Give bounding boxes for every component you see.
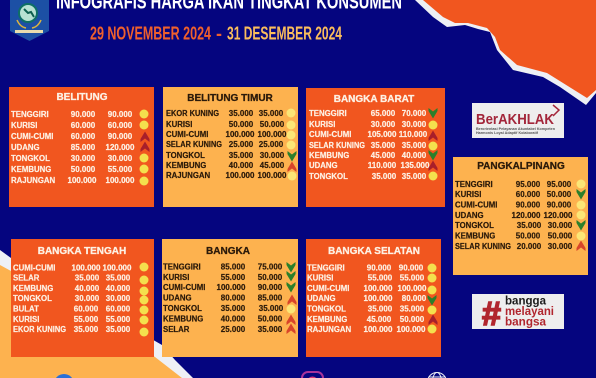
row: Rajungan: 100.000 [397, 325, 426, 334]
row: Cumi-cumi: 100.000 [72, 264, 101, 272]
row: Kembung: 40.000 [229, 161, 254, 170]
row: Cumi-cumi: CUMI-CUMI [13, 264, 55, 272]
row: Kembung [11, 164, 148, 174]
row: Kembung: KEMBUNG [307, 315, 347, 324]
row: Tenggiri: 90.000 [367, 264, 392, 272]
row: Tongkol: 35.000 [400, 304, 425, 314]
panel: Bangka Tengah: BANGKA TENGAH [38, 246, 126, 257]
row: Kurisi [455, 189, 586, 200]
row: Kurisi [166, 120, 296, 130]
row: Rajungan: RAJUNGAN [11, 176, 56, 185]
row: Tenggiri [455, 180, 586, 189]
row: Kurisi: 55.000 [106, 315, 131, 324]
row: Tongkol: TONGKOL [166, 151, 205, 160]
row: Tongkol [455, 220, 586, 230]
date range: 31 DESEMBER 2024 [227, 24, 342, 44]
row: Tongkol: TONGKOL [13, 294, 52, 303]
row: Cumi-cumi: 90.000 [547, 200, 572, 210]
row: Ekor Kuning: 35.000 [74, 325, 99, 334]
row: Rajungan: RAJUNGAN [307, 325, 352, 334]
row: Tenggiri: TENGGIRI [307, 264, 345, 272]
row: Kembung: 45.000 [367, 315, 392, 324]
row: Kurisi [307, 274, 436, 282]
row: Selar Kuning: SELAR KUNING [309, 141, 365, 150]
row: Selar Kuning: SELAR KUNING [455, 242, 511, 251]
row: Tongkol: TONGKOL [11, 154, 50, 163]
row: Udang [11, 142, 150, 152]
row: Kembung: 50.000 [400, 315, 425, 324]
row: Kembung: KEMBUNG [166, 161, 206, 170]
row: Kurisi: KURISI [455, 190, 481, 199]
row: Udang: 120.000 [106, 143, 135, 152]
row: Ekor Kuning: 35.000 [106, 325, 131, 334]
row: Selar Kuning: 20.000 [517, 242, 542, 251]
row: Tongkol: 30.000 [75, 294, 100, 303]
row: Kurisi: 60.000 [71, 121, 96, 130]
row: Udang: UDANG [307, 294, 336, 303]
row: Kembung: 50.000 [258, 314, 283, 324]
row: Cumi-cumi: 90.000 [108, 132, 133, 141]
row: Kurisi: KURISI [307, 274, 333, 282]
logo: provincial shield [10, 0, 49, 41]
row: Cumi-cumi [166, 130, 296, 140]
row: Rajungan: 100.000 [106, 176, 135, 185]
row: Selar Kuning: 35.000 [402, 141, 427, 150]
decoration: top right orange shape [423, 0, 596, 98]
row: Tenggiri: 75.000 [258, 262, 283, 272]
row: Cumi-cumi [309, 130, 438, 141]
row: Tongkol: 35.000 [372, 172, 397, 181]
panel: Bangka Selatan: BANGKA SELATAN [328, 246, 420, 257]
row: Rajungan [307, 324, 436, 334]
panel: Bangka Selatan [306, 239, 441, 357]
row: Rajungan: 100.000 [226, 171, 255, 180]
row: Tongkol: TONGKOL [307, 304, 346, 314]
row: Udang: 85.000 [71, 143, 96, 152]
row: Ekor Kuning: 35.000 [229, 109, 254, 118]
row: Bulat [13, 304, 148, 314]
row: Kembung: KEMBUNG [163, 314, 203, 324]
row: Kurisi: 55.000 [368, 274, 393, 282]
row: Cumi-cumi: 110.000 [399, 130, 428, 139]
row: Kembung: 40.000 [75, 284, 100, 293]
row: Kurisi [309, 120, 438, 130]
row: Kurisi: 60.000 [516, 190, 541, 199]
row: Selar Kuning: 25.000 [229, 140, 254, 149]
badge: BerAKHLAK: Harmonis Loyal Adaptif Kolaboratif [476, 131, 539, 135]
row: Tongkol: TONGKOL [309, 172, 348, 181]
panel: Belitung Timur: BELITUNG TIMUR [187, 93, 274, 104]
row: Kurisi: 30.000 [402, 120, 427, 129]
row: Cumi-cumi: 100.000 [364, 284, 393, 293]
row: Kurisi: KURISI [13, 315, 39, 324]
row: Kembung: 40.000 [221, 314, 246, 324]
row: Kurisi: 55.000 [400, 274, 425, 282]
row: Udang [307, 294, 436, 306]
row: Udang: UDANG [455, 211, 484, 220]
row: Tongkol: 30.000 [548, 221, 573, 230]
row: Cumi-cumi: CUMI-CUMI [166, 130, 208, 139]
row: Kembung: KEMBUNG [309, 151, 349, 160]
decoration: bottom left torn white edge [0, 250, 193, 378]
row: Tenggiri: 85.000 [221, 262, 246, 272]
row: Kembung: KEMBUNG [455, 232, 495, 240]
row: Cumi-cumi [455, 200, 586, 210]
row: Selar: SELAR [13, 274, 40, 282]
row: Kurisi [13, 315, 148, 324]
row: Kembung: KEMBUNG [11, 165, 51, 174]
row: Udang [455, 210, 586, 220]
row: Selar Kuning: SELAR KUNING [166, 140, 222, 149]
row: Cumi-cumi: CUMI-CUMI [309, 130, 351, 139]
panel: Bangka Barat: BANGKA BARAT [334, 94, 414, 105]
row: Tongkol: 30.000 [106, 294, 131, 303]
row: Ekor Kuning: EKOR KUNING [166, 109, 219, 118]
row: Kembung: 40.000 [106, 284, 131, 293]
row: Cumi-cumi: CUMI-CUMI [163, 283, 205, 292]
row: Udang: UDANG [11, 143, 40, 152]
row: Kurisi: 30.000 [371, 120, 396, 129]
row: Tenggiri: TENGGIRI [11, 110, 49, 119]
row: Kurisi: 50.000 [547, 190, 572, 199]
row: Ekor Kuning: 35.000 [259, 109, 284, 118]
row: Tongkol: TONGKOL [163, 304, 202, 313]
row: Cumi-cumi [13, 262, 148, 272]
row: Udang: 135.000 [401, 161, 430, 170]
badge: BerAKHLAK: Berorientasi Pelayanan Akuntabel Kompeten [476, 127, 555, 131]
row: Udang: 120.000 [512, 211, 541, 220]
row: Kembung [455, 232, 586, 240]
row: Udang: 100.000 [364, 294, 393, 303]
row: Tenggiri: 90.000 [71, 110, 96, 119]
row: Tenggiri: TENGGIRI [163, 262, 201, 272]
row: Tongkol: 35.000 [368, 304, 393, 314]
row: Bulat: 60.000 [106, 304, 131, 314]
row: Tongkol [163, 304, 296, 314]
row: Selar [163, 324, 296, 334]
badge: bangga melayani bangsa: # [482, 295, 501, 332]
row: Kurisi: 55.000 [74, 315, 99, 324]
row: Selar Kuning: 25.000 [259, 140, 284, 149]
row: Tongkol: 30.000 [71, 154, 96, 163]
badge: bangga melayani bangsa: bangsa [505, 314, 546, 328]
row: Tongkol [11, 154, 148, 163]
row: Kurisi: KURISI [163, 273, 189, 282]
row: Kembung: 50.000 [548, 232, 573, 240]
row: Kembung: 45.000 [371, 151, 396, 160]
row: Kembung [309, 150, 438, 160]
badge: BerAKHLAK: BerAKHLAK [476, 111, 554, 128]
row: Cumi-cumi [307, 284, 436, 294]
panel: Pangkalpinang: PANGKALPINANG [477, 161, 565, 172]
row: Tenggiri [309, 108, 438, 118]
badge: bangga melayani bangsa: bangga [505, 294, 546, 308]
row: Kembung: 55.000 [108, 165, 133, 174]
row: Rajungan: 100.000 [258, 171, 287, 180]
date range: 29 NOVEMBER 2024 [90, 24, 211, 44]
row: Rajungan [166, 171, 296, 180]
row: Cumi-cumi [163, 282, 296, 292]
icon: instagram [302, 372, 323, 378]
row: Selar: SELAR [163, 325, 190, 334]
row: Kembung [13, 284, 148, 296]
row: Selar Kuning: 35.000 [371, 141, 396, 150]
row: Tongkol [309, 172, 438, 181]
row: Udang: 85.000 [258, 294, 283, 302]
row: Tenggiri: TENGGIRI [455, 180, 493, 189]
row: Tenggiri: 95.000 [516, 180, 541, 189]
row: Kurisi: 55.000 [221, 273, 246, 282]
row: Udang: UDANG [163, 294, 192, 302]
row: Kembung [166, 161, 296, 172]
row: Bulat: BULAT [13, 304, 39, 314]
row: Kurisi: 50.000 [260, 120, 285, 129]
row: Selar Kuning [455, 240, 586, 251]
row: Tongkol: 35.000 [517, 221, 542, 230]
row: Kembung: 50.000 [71, 165, 96, 174]
panel: Belitung [9, 87, 154, 207]
row: Udang: UDANG [309, 161, 338, 170]
row: Udang [163, 294, 296, 305]
row: Cumi-cumi: 60.000 [71, 132, 96, 141]
row: Selar Kuning [166, 140, 296, 150]
row: Ekor Kuning [13, 325, 148, 336]
row: Tenggiri: TENGGIRI [309, 109, 347, 118]
row: Bulat: 60.000 [74, 304, 99, 314]
row: Tongkol: 30.000 [260, 151, 285, 160]
row: Kurisi [11, 120, 148, 130]
row: Tongkol: 35.000 [229, 151, 254, 160]
panel: Belitung Timur [163, 87, 298, 207]
panel: Bangka: BANGKA [206, 246, 250, 257]
row: Tongkol: 35.000 [402, 172, 427, 181]
row: Tenggiri: 90.000 [108, 110, 133, 119]
row: Tenggiri: 70.000 [402, 109, 427, 118]
row: Selar: 35.000 [75, 274, 100, 282]
row: Rajungan [11, 176, 148, 186]
row: Udang: 120.000 [544, 211, 573, 220]
row: Cumi-cumi: 105.000 [368, 130, 397, 139]
row: Kembung: 50.000 [516, 232, 541, 240]
row: Kurisi: 60.000 [108, 121, 133, 130]
panel: Bangka Barat [306, 88, 445, 207]
row: Kembung: 40.000 [402, 151, 427, 160]
panel: Bangka Tengah [11, 239, 154, 357]
row: Tongkol: 35.000 [259, 304, 284, 313]
row: Selar: 35.000 [106, 274, 131, 282]
row: Kurisi [163, 271, 296, 282]
row: Cumi-cumi: 100.000 [258, 130, 287, 139]
row: Kurisi: 50.000 [229, 120, 254, 129]
date range: - [216, 24, 222, 44]
row: Udang: 80.000 [221, 294, 246, 302]
row: Cumi-cumi: 100.000 [103, 264, 132, 272]
row: Cumi-cumi: CUMI-CUMI [307, 284, 349, 293]
badge: BerAKHLAK [472, 103, 564, 138]
row: Tenggiri: 90.000 [399, 264, 424, 272]
panel: Pangkalpinang [453, 157, 588, 275]
row: Tenggiri: 95.000 [547, 180, 572, 189]
decoration: bottom left yellow shape [0, 265, 182, 378]
row: Udang: 80.000 [402, 294, 427, 303]
row: Tongkol: 30.000 [108, 154, 133, 163]
row: Selar: 25.000 [221, 325, 246, 334]
row: Kembung [307, 314, 438, 325]
badge: bangga melayani bangsa: melayani [505, 304, 554, 318]
row: Rajungan: 100.000 [68, 176, 97, 185]
row: Tongkol [166, 151, 296, 162]
row: Kurisi: 50.000 [258, 273, 283, 282]
row: Cumi-cumi: 100.000 [226, 130, 255, 139]
row: Tongkol: 35.000 [221, 304, 246, 313]
row: Cumi-cumi: 100.000 [398, 284, 427, 293]
icon: website globe [428, 372, 446, 378]
row: Tenggiri [163, 262, 296, 272]
row: Udang: 110.000 [368, 161, 397, 170]
row: Rajungan: 100.000 [364, 325, 393, 334]
row: Udang [309, 160, 438, 171]
badge: bangga melayani bangsa [472, 294, 564, 332]
row: Selar Kuning: 30.000 [548, 242, 573, 251]
row: Kembung: 45.000 [260, 161, 285, 170]
row: Ekor Kuning [166, 108, 296, 118]
panel: Bangka [162, 239, 298, 357]
row: Tongkol: TONGKOL [455, 221, 494, 230]
row: Cumi-cumi: 100.000 [217, 283, 246, 292]
row: Ekor Kuning: EKOR KUNING [13, 325, 66, 334]
row: Kurisi: KURISI [11, 121, 37, 130]
row: Cumi-cumi [11, 132, 150, 142]
row: Cumi-cumi: CUMI-CUMI [11, 132, 53, 141]
row: Cumi-cumi: CUMI-CUMI [455, 200, 497, 210]
panel: Belitung: BELITUNG [56, 92, 108, 103]
date range [90, 24, 342, 44]
row: Tongkol [307, 304, 436, 314]
row: Tenggiri [307, 264, 436, 272]
row: Rajungan: RAJUNGAN [166, 171, 211, 180]
row: Kembung [163, 314, 296, 325]
icon: facebook [54, 374, 74, 378]
row: Selar [13, 274, 148, 284]
row: Tenggiri: 65.000 [371, 109, 396, 118]
row: Kembung: KEMBUNG [13, 284, 53, 293]
row: Kurisi: KURISI [166, 120, 192, 129]
row: Selar Kuning [309, 141, 438, 150]
decoration: top right torn white edge [415, 0, 596, 105]
row: Kurisi: KURISI [309, 120, 335, 129]
row: Tenggiri [11, 110, 148, 119]
row: Cumi-cumi: 90.000 [516, 200, 541, 210]
row: Cumi-cumi: 90.000 [258, 283, 283, 292]
row: Tongkol [13, 294, 148, 304]
row: Selar: 35.000 [258, 325, 283, 334]
